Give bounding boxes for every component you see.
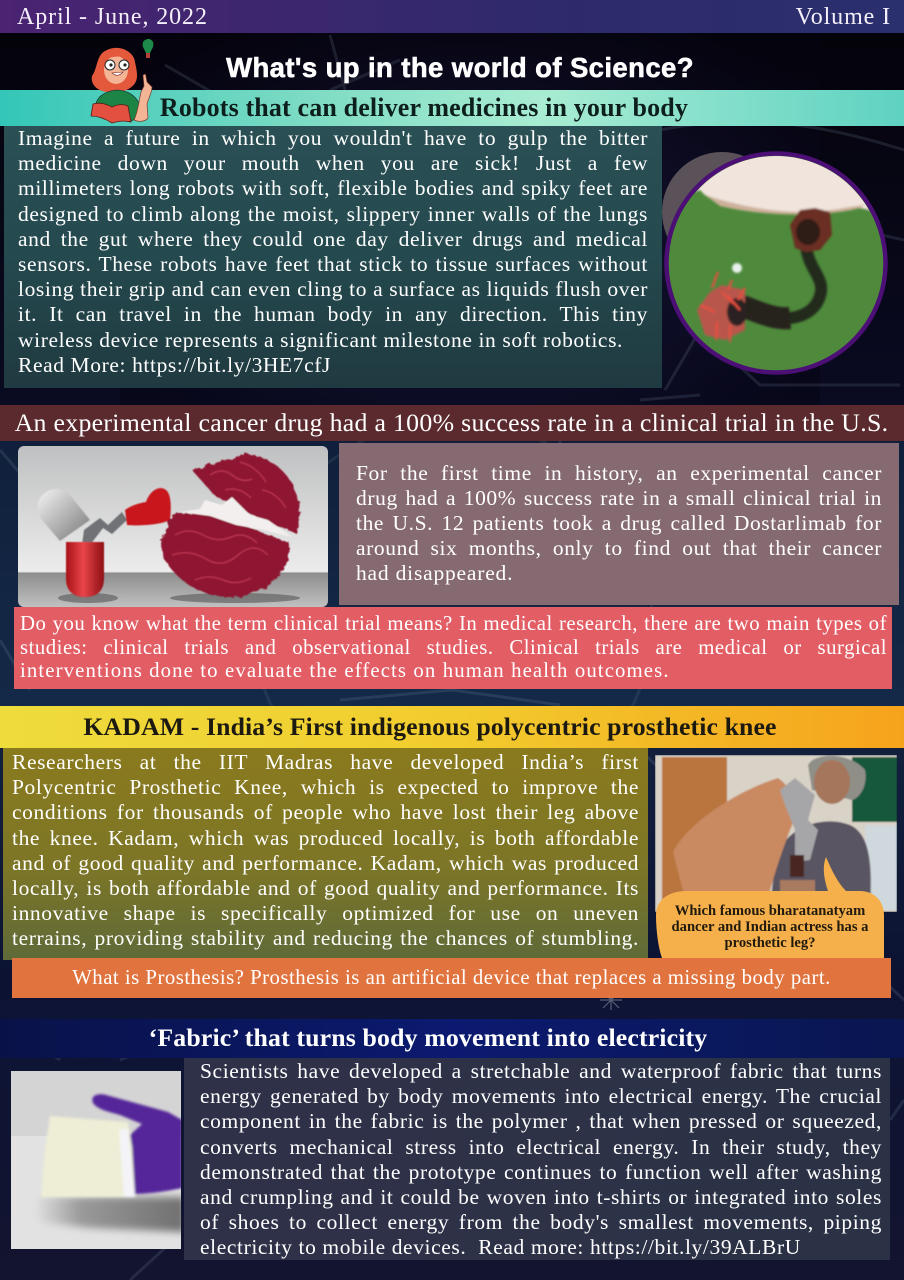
bubble text: Which famous bharatanatyam xyxy=(675,903,865,919)
text: robots article: medicine down your mouth when you are sick! Just a few xyxy=(18,151,648,175)
panel: robots article xyxy=(4,126,662,388)
panel: cancer drug article xyxy=(339,443,899,605)
text: robots article: designed to climb along the moist, slippery inner walls of the lungs xyxy=(18,202,648,226)
text: Kadam article: and of good quality and performance. Kadam, which was produced xyxy=(12,851,639,875)
text: cancer drug article: around six months, only to find out that their cancer xyxy=(356,536,882,560)
text: Kadam article: Polycentric Prosthetic Knee, which is expected to improve the xyxy=(12,775,639,799)
heading: Kadam: KADAM - India’s First indigenous polycentric prosthetic knee xyxy=(83,712,777,741)
bubble text xyxy=(672,903,868,951)
text: Kadam article: terrains, providing stability and reducing the chances of stumbling. xyxy=(12,926,639,950)
text: prosthesis definition: What is Prosthesis? Prosthesis is an artificial device that replaces a missing body part. xyxy=(72,966,831,989)
photo: soft robot in circular frame xyxy=(662,151,888,375)
text: robots article xyxy=(18,126,648,377)
text: clinical trial definition: Do you know what the term clinical trial means? In medical research, there are two main types of xyxy=(20,612,887,635)
heading: fabric: ‘Fabric’ that turns body movement into electricity xyxy=(149,1023,707,1052)
text: cancer drug article xyxy=(356,461,882,585)
heading band: fabric xyxy=(0,1019,904,1058)
bubble shape xyxy=(656,857,884,958)
panel: Kadam article xyxy=(3,748,648,960)
text: Kadam article: innovative shape is specifically optimized for use on uneven xyxy=(12,901,639,925)
text: fabric article: and crumpling and it could be woven into t-shirts or integrated into soles xyxy=(200,1185,882,1209)
text: fabric article: of shoes to collect energy from the body's smallest movements, piping xyxy=(200,1210,882,1234)
text: cancer drug article: the U.S. 12 patients took a drug called Dostarlimab for xyxy=(356,511,882,535)
text: cancer drug article: For the first time in history, an experimental cancer xyxy=(356,461,882,485)
callout: clinical trial definition xyxy=(14,607,892,689)
photo: woman holding prosthetic knee xyxy=(655,755,897,912)
photo: capsule punching a tumour xyxy=(18,446,328,607)
text: robots article: sensors. These robots have feet that stick to tissue surfaces without xyxy=(18,252,648,276)
panel: fabric article xyxy=(184,1058,890,1260)
text: Kadam article: Researchers at the IIT Madras have developed India’s first xyxy=(12,750,639,774)
text: clinical trial definition: studies: clinical trials and observational studies. Clinical trials are medical or surgical xyxy=(20,636,887,659)
heading: cancer drug: An experimental cancer drug had a 100% success rate in a clinical trial in the U.S. xyxy=(15,408,888,437)
text: robots article: losing their grip and can even cling to a surface as liquids flush over xyxy=(18,277,648,301)
title: What's up in the world of Science? xyxy=(226,52,694,83)
text: robots article: Imagine a future in which you wouldn't have to gulp the bitter xyxy=(18,126,648,150)
text: fabric article: electricity to mobile devices. Read more: https://bit.ly/39ALBrU xyxy=(200,1235,801,1259)
photo: gloved hand holding fabric xyxy=(11,1071,181,1249)
text: fabric article xyxy=(200,1059,882,1259)
text: fabric article: Scientists have developed a stretchable and waterproof fabric that turns xyxy=(200,1059,882,1083)
text: fabric article: converts mechanical stress into electrical energy. In their study, they xyxy=(200,1135,882,1159)
text: clinical trial definition xyxy=(20,612,887,682)
heading band: robots xyxy=(0,90,904,126)
text: Kadam article: locally, is both affordable and of good quality and performance. Its xyxy=(12,876,639,900)
bubble text: prosthetic leg? xyxy=(725,935,815,951)
text: robots article: it. It can travel in the human body in any direction. This tiny xyxy=(18,302,648,326)
text: robots article: and the gut where they could one day deliver drugs and medical xyxy=(18,227,648,251)
text: robots article: Read More: https://bit.ly/3HE7cfJ xyxy=(18,353,331,377)
text: Kadam article: conditions for thousands of people who have lost their leg above xyxy=(12,800,639,824)
heading band: cancer drug xyxy=(0,405,904,441)
text: fabric article: demonstrated that the prototype continues to function well after washing xyxy=(200,1160,882,1184)
text: Kadam article xyxy=(12,750,639,950)
text: fabric article: energy generated by body movements into electrical energy. The crucial xyxy=(200,1084,882,1108)
heading band: Kadam xyxy=(0,706,904,748)
heading: robots: Robots that can deliver medicines in your body xyxy=(160,93,688,122)
top bar: date and volume xyxy=(0,0,904,33)
text: robots article: wireless device represents a significant milestone in soft robotics. xyxy=(18,328,623,352)
text: cancer drug article: drug had a 100% success rate in a small clinical trial in xyxy=(356,486,882,510)
text: clinical trial definition: interventions done to evaluate the effects on human health outcomes. xyxy=(20,659,670,682)
bubble text: dancer and Indian actress has a xyxy=(672,919,868,935)
text: fabric article: component in the fabric is the polymer , that when pressed or squeezed, xyxy=(200,1109,882,1133)
text: robots article: millimeters long robots with soft, flexible bodies and spiky feet are xyxy=(18,176,648,200)
text: Kadam article: the knee. Kadam, which was produced locally, is both affordable xyxy=(12,826,639,850)
text: cancer drug article: had disappeared. xyxy=(356,561,513,585)
callout: prosthesis definition xyxy=(12,958,891,998)
mascot: girl with book and light bulb xyxy=(90,39,154,124)
speech bubble: bharatanatyam question xyxy=(656,857,884,958)
date: April - June, 2022 xyxy=(17,4,208,30)
volume: Volume I xyxy=(796,4,891,30)
